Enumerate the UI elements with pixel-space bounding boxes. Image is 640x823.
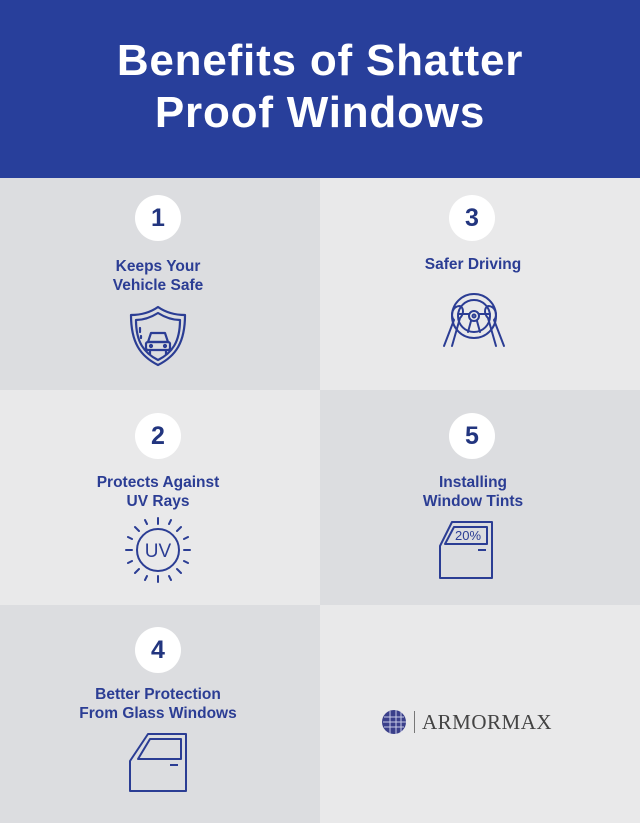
- text: Keeps Your: [116, 258, 200, 275]
- text: [422, 474, 523, 510]
- text: Window Tints: [423, 493, 523, 510]
- text: [112, 258, 203, 294]
- number 4: 4: [151, 636, 165, 664]
- number 3: [449, 195, 495, 241]
- panel: 5 window tints: [320, 390, 640, 605]
- panel: 3 safer driving: [320, 178, 640, 390]
- text: Safer Driving: [425, 256, 521, 273]
- panel: logo: [320, 605, 640, 823]
- number 2: 2: [151, 422, 165, 450]
- text: Protects Against: [97, 474, 219, 491]
- number 1: 1: [151, 204, 165, 232]
- number 5: 5: [465, 422, 479, 450]
- logo: armormax: ARMORMAX: [422, 710, 552, 734]
- number 1: [135, 195, 181, 241]
- panel: 4 glass protection: [0, 605, 320, 823]
- text: [97, 474, 220, 510]
- icon: door with tint: [439, 521, 493, 579]
- text: From Glass Windows: [79, 705, 237, 722]
- panel: 1 keeps vehicle safe: [0, 178, 320, 390]
- number 3: 3: [465, 204, 479, 232]
- icon: car door: [129, 733, 187, 792]
- panel: 2 UV: [0, 390, 320, 605]
- icon: UV sun: UV: [145, 541, 172, 562]
- text: Installing: [439, 474, 507, 491]
- text: [79, 686, 237, 722]
- number 5: [449, 413, 495, 459]
- title: [0, 0, 640, 178]
- number 4: [135, 627, 181, 673]
- icon: shield car: [130, 306, 186, 366]
- text: Better Protection: [95, 686, 221, 703]
- text: Vehicle Safe: [113, 277, 203, 294]
- text: UV Rays: [127, 493, 189, 510]
- title: Benefits of Shatter: [117, 36, 523, 85]
- icon: UV sun: [125, 517, 191, 583]
- number 2: [135, 413, 181, 459]
- icon: steering wheel: [443, 293, 505, 347]
- title: Proof Windows: [155, 88, 485, 137]
- icon: door with tint: 20%: [455, 528, 481, 543]
